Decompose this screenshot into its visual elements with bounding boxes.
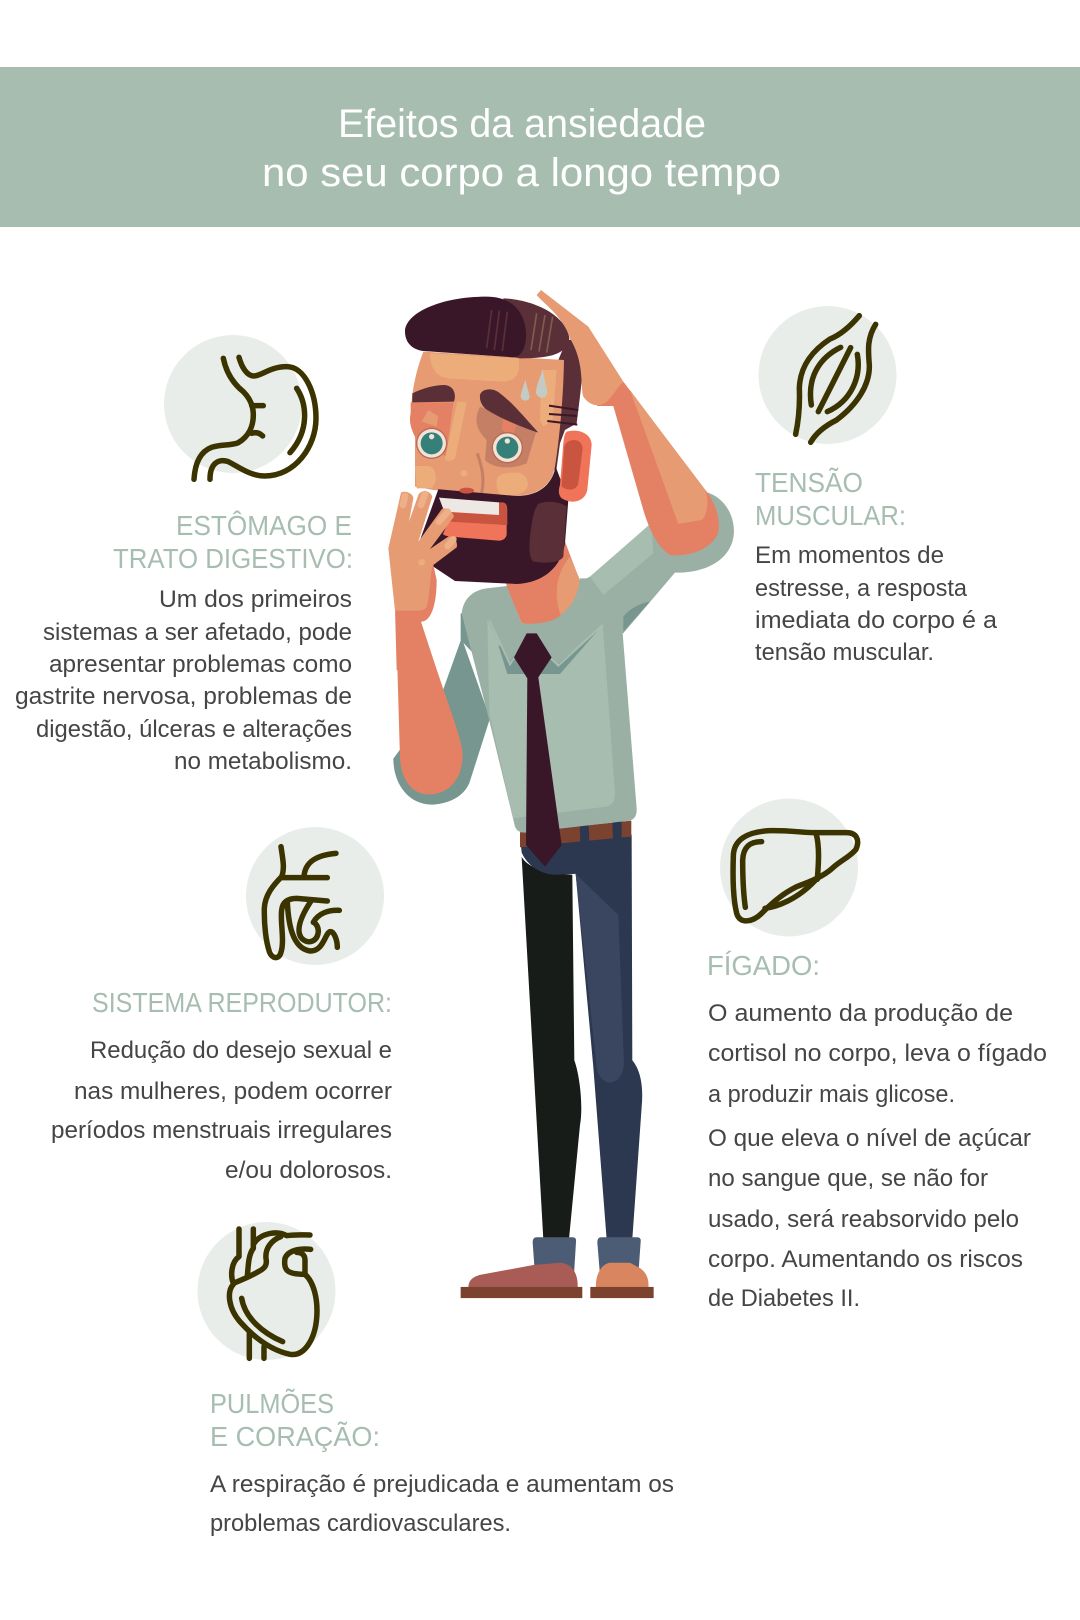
heading: SISTEMA REPRODUTOR: <box>92 987 392 1018</box>
text block: O que eleva o nível de açúcar <box>708 1125 1031 1152</box>
panel: muscle tension <box>755 306 997 666</box>
text block: corpo. Aumentando os riscos <box>708 1246 1023 1273</box>
right leg <box>521 835 642 1239</box>
panel: stomach and digestive tract <box>15 335 353 775</box>
heading <box>755 467 906 531</box>
icon: heart <box>198 1222 336 1360</box>
heading: FÍGADO: <box>707 950 820 981</box>
text block: períodos menstruais irregulares <box>51 1117 392 1144</box>
text block <box>51 1037 392 1184</box>
shoulder shadow <box>461 613 473 653</box>
text block: sistemas a ser afetado, pode <box>43 619 352 646</box>
central figure: anxious man <box>388 290 734 1298</box>
face <box>410 352 564 496</box>
text block <box>15 586 352 775</box>
right eye <box>492 432 523 463</box>
text block: a produzir mais glicose. <box>708 1081 955 1108</box>
text block: e/ou dolorosos. <box>225 1157 392 1184</box>
text block: tensão muscular. <box>755 639 934 666</box>
belt <box>520 820 631 847</box>
right shoe <box>590 1263 654 1298</box>
heading: TRATO DIGESTIVO: <box>113 543 353 574</box>
trouser cuffs <box>533 1237 576 1275</box>
text block: de Diabetes II. <box>708 1285 860 1312</box>
left forearm <box>396 620 463 794</box>
text block: digestão, úlceras e alterações <box>36 716 352 743</box>
icon: liver <box>720 798 858 936</box>
text block: usado, será reabsorvido pelo <box>708 1206 1019 1233</box>
collar <box>488 615 603 674</box>
panel: lungs and heart <box>198 1222 674 1537</box>
eyebrows <box>412 385 538 433</box>
heading: MUSCULAR: <box>755 500 906 531</box>
text block: Em momentos de <box>755 542 944 569</box>
left shoe <box>461 1263 582 1298</box>
lower arm segment <box>395 565 437 670</box>
text block: problemas cardiovasculares. <box>210 1510 511 1537</box>
text block: gastrite nervosa, problemas de <box>15 683 352 710</box>
panel: liver <box>707 798 1047 1312</box>
raised forearm <box>597 382 719 555</box>
mouth <box>439 498 507 541</box>
hand on head <box>537 290 623 405</box>
heading: TENSÃO <box>755 467 863 498</box>
text block: Redução do desejo sexual e <box>90 1037 392 1064</box>
panel: reproductive system <box>51 827 392 1184</box>
text block: cortisol no corpo, leva o fígado <box>708 1040 1047 1067</box>
title: no seu corpo a longo tempo <box>262 151 781 195</box>
icon: reproductive system <box>246 827 384 965</box>
ear <box>559 431 592 502</box>
title <box>262 102 781 195</box>
heading <box>113 510 353 574</box>
beard <box>420 467 568 584</box>
text block: Um dos primeiros <box>159 586 352 613</box>
hand <box>388 491 457 611</box>
necktie <box>514 633 562 867</box>
text block: apresentar problemas como <box>49 651 352 678</box>
lower body <box>393 620 654 1298</box>
header band with title <box>0 67 1080 227</box>
text block <box>708 1000 1047 1312</box>
shirt body <box>462 578 637 833</box>
heading: E CORAÇÃO: <box>210 1421 380 1452</box>
left eye <box>416 428 447 459</box>
left sleeve and cuff <box>393 638 490 805</box>
text block: nas mulheres, podem ocorrer <box>74 1078 392 1105</box>
torso <box>461 578 637 867</box>
text block: A respiração é prejudicada e aumentam os <box>210 1471 674 1498</box>
text block <box>755 542 997 666</box>
title: Efeitos da ansiedade <box>338 102 706 146</box>
text block: estresse, a resposta <box>755 575 967 602</box>
text block: no sangue que, se não for <box>708 1165 988 1192</box>
sideburn strokes <box>547 406 578 425</box>
icon: stomach <box>164 335 316 479</box>
text block: no metabolismo. <box>174 748 352 775</box>
raised sleeve <box>583 492 734 642</box>
heading <box>210 1388 380 1452</box>
sweat drops <box>521 369 547 401</box>
text block: imediata do corpo é a <box>755 607 997 634</box>
neck <box>503 542 579 624</box>
text block: O aumento da produção de <box>708 1000 1013 1027</box>
back of hair and sideburn <box>550 339 584 480</box>
text block <box>210 1471 674 1537</box>
upper body and head <box>405 290 719 624</box>
mouth and hand at mouth <box>388 491 507 670</box>
left leg <box>522 857 581 1239</box>
icon: muscle <box>758 306 896 444</box>
hair <box>405 297 569 358</box>
heading: ESTÔMAGO E <box>176 510 352 541</box>
heading: PULMÕES <box>210 1388 334 1419</box>
